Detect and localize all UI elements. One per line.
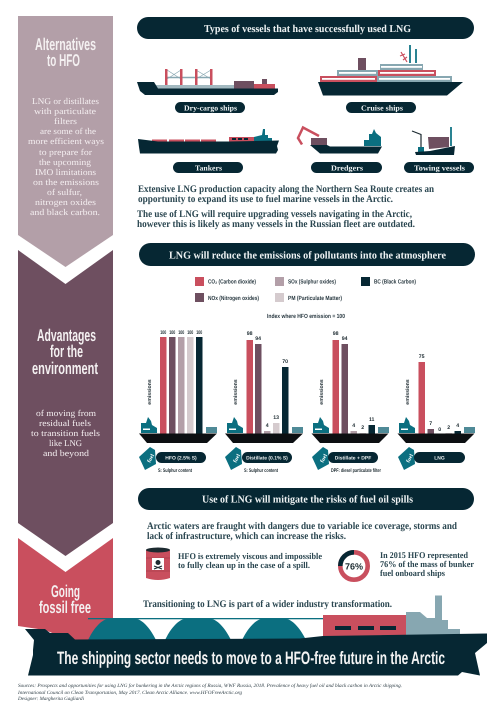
panel: alternatives to HFO: LNG or distillates <box>32 96 100 106</box>
panel: alternatives to HFO: more efficient ways <box>28 136 105 146</box>
text: HFO viscous <box>178 551 322 570</box>
sources: Sources: Prospects and opportunities for using LNG for bunkering in the Arctic regions of Russia, WWF Russia, 2018. Prevalence of heavy fuel oil and black carbon in Arctic shipping. <box>18 683 402 689</box>
panel: advantages for the environment: of moving from <box>36 408 96 418</box>
text: 2015 HFO share: fuel onboard ships <box>380 568 446 578</box>
label: towing vessels: Towing vessels <box>414 164 465 172</box>
text: LNG production capacity: opportunity to expand its use to fuel marine vessels in the Arctic. <box>138 194 393 205</box>
legend: SOx (Sulphur oxides) <box>288 278 336 286</box>
chart: HFO: 100 <box>160 330 166 336</box>
icon: dry-cargo ship <box>137 69 278 95</box>
text: arctic waters <box>147 521 457 542</box>
chart: distillate <box>225 331 303 474</box>
text: 2015 HFO share <box>380 550 474 578</box>
panel: advantages for the environment: and beyond <box>43 448 90 458</box>
chart: distillate: S: Sulphur content <box>244 468 278 474</box>
heading: fuel oil spills: Use of LNG will mitigate the risks of fuel oil spills <box>202 494 413 506</box>
panel: advantages for the environment: like LNG <box>49 438 83 448</box>
text: 2015 HFO share: In 2015 HFO represented <box>380 550 468 560</box>
chart: HFO: emissions <box>147 379 153 405</box>
chart: distillate: emissions <box>233 379 239 405</box>
panel: alternatives to HFO <box>18 16 113 267</box>
legend: PM (Particulate Matter) <box>288 295 342 302</box>
chart: LNG <box>398 354 475 470</box>
chart: LNG: 7 <box>429 421 432 427</box>
legend <box>195 277 416 302</box>
chart: LNG: LNG <box>434 456 445 462</box>
heading: types of vessels: Types of vessels that have successfully used LNG <box>204 24 411 35</box>
chart: LNG: 75 <box>419 354 425 360</box>
panel: alternatives to HFO: of sulfur, <box>47 187 82 197</box>
chart: distillate + DPF: Distillate + DPF <box>335 456 371 462</box>
text: HFO viscous: to fully clean up in the case of a spill. <box>178 560 310 570</box>
text: upgrading vessels <box>137 209 415 230</box>
chart: LNG: 4 <box>456 423 459 429</box>
icon: oil barrel <box>146 548 170 580</box>
label: tankers <box>173 162 243 173</box>
panel: advantages for the environment: residual fuels <box>39 418 92 428</box>
panel: alternatives to HFO: with particulate <box>34 106 96 116</box>
chart: HFO: S: Sulphur content <box>158 468 192 474</box>
chart: distillate + DPF: 4 <box>352 423 355 429</box>
chart: distillate + DPF: 98 <box>333 331 339 337</box>
label: dry-cargo ships <box>175 102 245 113</box>
panel: alternatives to HFO: are some of the <box>40 126 96 136</box>
illustration: large LNG ship with banner <box>25 596 487 676</box>
panel: alternatives to HFO: Alternatives <box>35 35 96 54</box>
chart: distillate: 94 <box>255 336 261 342</box>
text: upgrading vessels: The use of LNG will require upgrading vessels navigating in the Arctic, <box>137 209 412 220</box>
chart: distillate + DPF: emissions <box>319 379 325 405</box>
label: cruise ships: Cruise ships <box>361 104 403 112</box>
sources <box>17 683 402 702</box>
icon: towing vessel <box>412 127 455 155</box>
label: cruise ships <box>346 102 416 113</box>
panel: alternatives to HFO: nitrogen oxides <box>35 197 97 207</box>
panel: going fossil free: fossil free <box>39 598 91 617</box>
panel: alternatives to HFO: the upcoming <box>39 157 92 167</box>
donut chart: 76%: 76% <box>345 562 363 572</box>
chart: HFO: HFO (2.5% S) <box>165 456 197 462</box>
panel: going fossil free: Going <box>51 582 80 601</box>
icon: cruise ship <box>318 45 463 96</box>
chart: HFO: 100 <box>196 330 202 336</box>
panel: alternatives to HFO: and black carbon. <box>30 207 100 217</box>
heading: reduce emissions: LNG will reduce the emissions of pollutants into the atmosphere <box>169 250 446 262</box>
chart: HFO: 100 <box>178 330 184 336</box>
legend: CO₂ (Carbon dioxide) <box>208 278 256 286</box>
panel: alternatives to HFO: to prepare for <box>39 147 92 157</box>
chart: distillate + DPF: 2 <box>361 425 364 431</box>
panel: going fossil free <box>18 538 113 642</box>
chart: distillate: 4 <box>266 423 269 429</box>
chart: distillate + DPF: fuel <box>319 453 329 464</box>
chart: HFO: 100 <box>187 330 193 336</box>
chart: distillate + DPF: 11 <box>369 417 375 423</box>
donut chart: 76% <box>340 552 368 580</box>
panel: alternatives to HFO: IMO limitations <box>35 167 97 177</box>
chart: distillate: Distillate (0.1% S) <box>246 456 288 462</box>
text: HFO viscous: HFO is extremely viscous and impossible <box>178 551 322 561</box>
panel: advantages for the environment: Advantages <box>37 326 96 345</box>
chart: LNG: 0 <box>438 427 441 433</box>
icon: dredger <box>298 128 382 154</box>
panel: advantages for the environment: to transition fuels <box>31 428 101 438</box>
label: towing vessels <box>404 162 474 173</box>
chart: distillate + DPF: DPF: diesel particulate filter <box>331 468 381 474</box>
chart: distillate: fuel <box>232 453 242 464</box>
chart: distillate: 98 <box>247 331 253 337</box>
chart: HFO: fuel <box>146 453 156 464</box>
chart: LNG: 2 <box>447 425 450 431</box>
label: dredgers <box>311 162 382 173</box>
chart: HFO: 100 <box>169 330 175 336</box>
chart: LNG: fuel <box>405 453 415 464</box>
label: tankers: Tankers <box>195 164 222 172</box>
text: upgrading vessels: however this is likely as many vessels in the Russian fleet are outdated. <box>137 219 415 230</box>
panel: alternatives to HFO: filters <box>54 116 78 126</box>
panel: advantages for the environment: environment <box>32 359 98 378</box>
icon: tanker <box>138 129 279 154</box>
chart: LNG: emissions <box>405 379 411 405</box>
text: LNG production capacity: Extensive LNG production capacity along the Northern Sea Route creates an <box>138 184 434 195</box>
chart: HFO <box>139 330 217 474</box>
chart: distillate + DPF: 94 <box>342 336 348 342</box>
text: transitioning: Transitioning to LNG is part of a wider industry transformation. <box>143 599 392 610</box>
heading: fuel oil spills <box>138 488 474 510</box>
text: LNG production capacity <box>138 184 434 205</box>
text: arctic waters: Arctic waters are fraught with dangers due to variable ice coverage, storms and <box>147 521 457 532</box>
text: 2015 HFO share: 76% of the mass of bunker <box>380 559 474 569</box>
heading: types of vessels <box>137 17 474 39</box>
text: arctic waters: lack of infrastructure, which can increase the risks. <box>147 531 346 542</box>
chart: distillate + DPF <box>312 331 389 474</box>
chart note: Index where HFO emission = 100 <box>267 313 346 320</box>
sources: Designer: Margherita Gagliardi <box>17 696 85 702</box>
panel: alternatives to HFO: on the emissions <box>33 177 100 187</box>
panel: alternatives to HFO: to HFO <box>47 51 80 70</box>
legend: NOx (Nitrogen oxides) <box>208 295 259 302</box>
panel: advantages for the environment: for the <box>50 342 83 361</box>
heading: reduce emissions <box>139 243 475 266</box>
chart: distillate: 70 <box>282 359 288 365</box>
label: dredgers: Dredgers <box>331 164 363 172</box>
panel: advantages for the environment <box>18 250 113 556</box>
label: dry-cargo ships: Dry-cargo ships <box>184 104 237 112</box>
legend: BC (Black Carbon) <box>374 278 416 286</box>
chart: distillate: 13 <box>273 415 279 421</box>
sources: International Council on Clean Transportation, May 2017. Clean Arctic Alliance. www.HFOFreeArctic.org <box>17 690 243 696</box>
